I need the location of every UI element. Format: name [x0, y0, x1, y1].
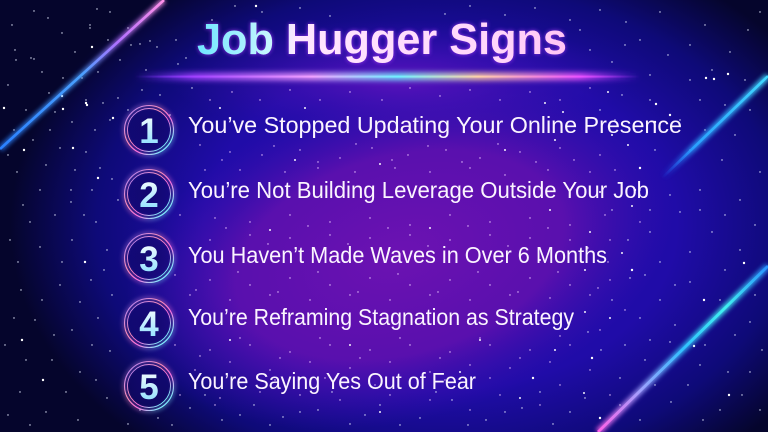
- badge 1: [124, 105, 174, 155]
- list item 2: [124, 169, 649, 219]
- text 1: You’ve Stopped Updating Your Online Presence: [188, 112, 682, 138]
- badge 4: [124, 298, 174, 348]
- badge 3: [124, 233, 174, 283]
- badge 2: 2: [139, 176, 159, 215]
- list item 3: [124, 233, 607, 283]
- badge 5: 5: [139, 368, 159, 407]
- beam: top-left diagonal light streak: [0, 0, 164, 149]
- list item 4: [124, 298, 574, 348]
- badge 5: [124, 361, 174, 411]
- title: Job Hugger Signs: [197, 15, 567, 64]
- list item 1: [124, 105, 682, 155]
- badge 1: 1: [139, 112, 159, 151]
- text 5: You’re Saying Yes Out of Fear: [188, 368, 476, 394]
- beam: right diagonal light streak: [662, 76, 768, 178]
- beam: bottom-right diagonal light streak: [598, 266, 768, 432]
- badge 4: 4: [139, 305, 159, 344]
- title divider glow line: [135, 73, 640, 80]
- text 3: You Haven’t Made Waves in Over 6 Months: [188, 242, 607, 268]
- text 2: You’re Not Building Leverage Outside Your Job: [188, 177, 649, 203]
- list item 5: [124, 361, 476, 411]
- badge 3: 3: [139, 240, 159, 279]
- text 4: You’re Reframing Stagnation as Strategy: [188, 304, 574, 330]
- badge 2: [124, 169, 174, 219]
- title: Job Hugger Signs: [197, 15, 567, 64]
